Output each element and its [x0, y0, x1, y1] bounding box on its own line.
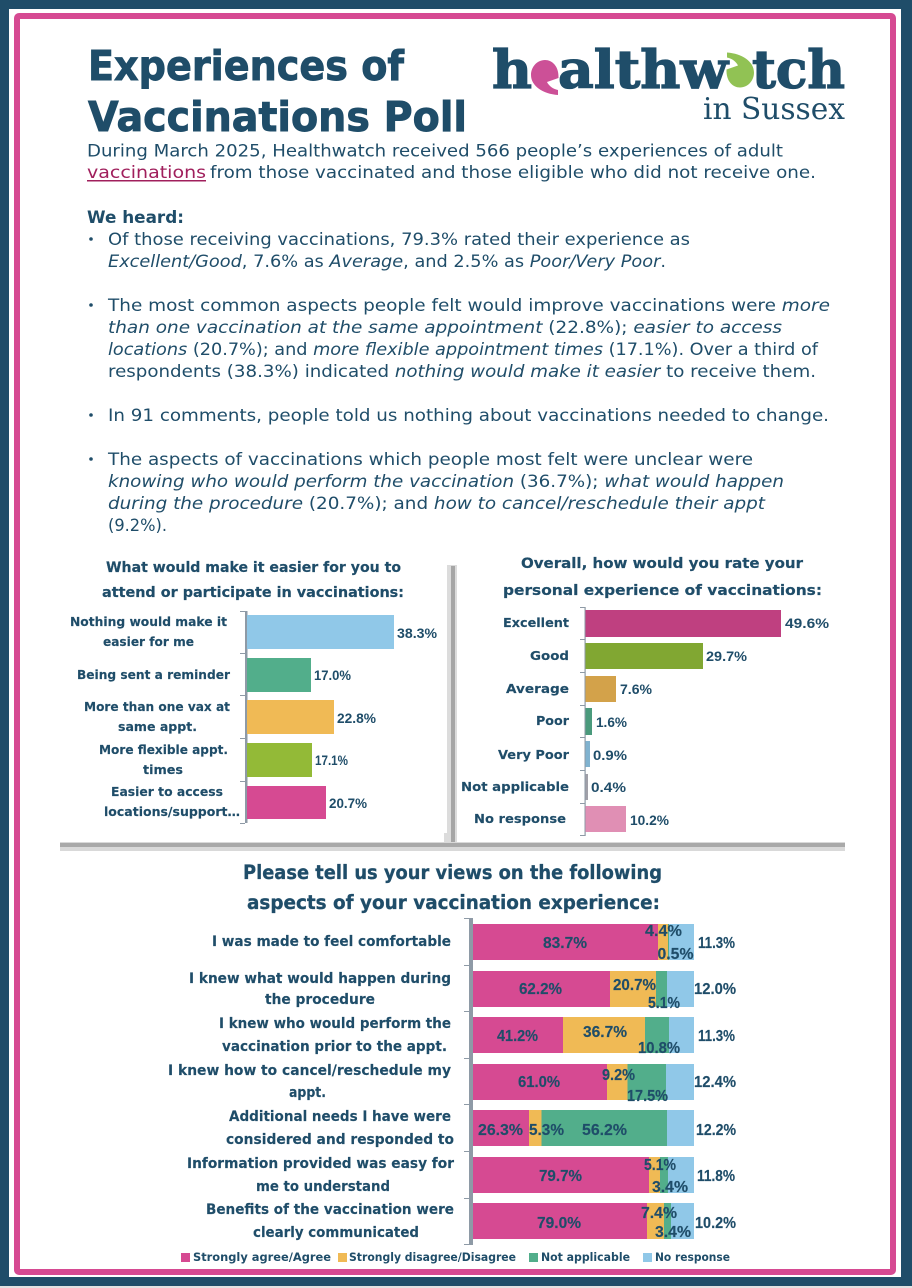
row: who would perform: 36.7% [583, 1024, 627, 1041]
bullet: improvements: locations (20.7%); and more flexible appointment times (17.1%). Over a third of [108, 339, 819, 359]
row: cancel or reschedule: 9.2% [602, 1067, 635, 1084]
axis [240, 611, 248, 824]
statement labels: considered and responded to [226, 1132, 454, 1148]
statement labels: I knew how to cancel/reschedule my [168, 1063, 451, 1079]
row: benefits communicated [473, 1203, 736, 1241]
category labels [461, 616, 570, 827]
row: who would perform: 10.8% [638, 1040, 680, 1057]
category labels: More than one vax at [84, 700, 230, 715]
statement labels: appt. [289, 1085, 326, 1101]
logo: Healthwatch in Sussex: tch [752, 40, 845, 101]
intro text [87, 140, 816, 182]
we heard heading: We heard: [87, 207, 184, 227]
row: cancel or reschedule: 17.5% [627, 1088, 668, 1105]
row: additional needs: 26.3% [478, 1122, 523, 1139]
panel dividers [60, 565, 845, 851]
row: what would happen: 5.1% [648, 995, 680, 1012]
category labels: Good [530, 649, 569, 664]
category labels [70, 615, 240, 820]
chart heading: personal experience of vaccinations: [503, 583, 822, 599]
category labels: locations/support… [104, 805, 240, 820]
category labels: Excellent [503, 616, 569, 631]
row: information easy to understand: 79.7% [539, 1168, 582, 1185]
category labels: Very Poor [498, 748, 570, 763]
logo: Healthwatch in Sussex: althw [558, 40, 729, 101]
statement labels: I knew what would happen during [189, 971, 451, 987]
axis [580, 607, 586, 836]
statement labels: Additional needs I have were [229, 1109, 451, 1125]
category labels: Poor [536, 714, 570, 729]
row: who would perform: 41.2% [497, 1028, 538, 1045]
row: benefits communicated: 10.2% [695, 1215, 736, 1232]
row: what would happen [473, 971, 736, 1012]
bullet: unclear aspects: during the procedure (20.7%); and how to cancel/reschedule their appt [108, 493, 767, 513]
row: comfortable [473, 923, 735, 963]
logo: Healthwatch in Sussex [492, 40, 845, 127]
values: 7.6% [620, 681, 653, 697]
row: what would happen: 62.2% [519, 981, 562, 998]
row: comfortable: 0.5% [658, 946, 694, 963]
statement labels: Information provided was easy for [187, 1156, 454, 1172]
logo: Healthwatch in Sussex: in Sussex [703, 92, 845, 127]
bullet: overall rating [89, 229, 690, 271]
category labels: More flexible appt. [99, 743, 228, 758]
category labels: same appt. [118, 720, 197, 735]
category labels: Easier to access [111, 785, 223, 800]
row: information easy to understand [473, 1157, 735, 1196]
panel: what would make it easier chart [70, 560, 438, 824]
logo: Healthwatch in Sussex: h [492, 40, 532, 101]
legend: No response [655, 1250, 730, 1264]
bullet: improvements: than one vaccination at the same appointment (22.8%); easier to access [108, 317, 782, 337]
legend [181, 1250, 730, 1264]
statement labels: Benefits of the vaccination were [206, 1202, 454, 1218]
intro text: During March 2025, Healthwatch received 566 people’s experiences of adult [87, 140, 783, 160]
bullet: unclear aspects: knowing who would perform the vaccination (36.7%); what would happen [108, 471, 784, 491]
row: information easy to understand: 3.4% [652, 1179, 688, 1196]
values: 38.3% [397, 625, 438, 641]
statement labels: the procedure [265, 992, 375, 1008]
row: who would perform: 11.3% [698, 1028, 735, 1045]
values: 10.2% [630, 812, 670, 828]
category labels: Average [506, 682, 569, 697]
intro text: vaccinations [87, 162, 206, 182]
statement labels: I was made to feel comfortable [212, 934, 451, 950]
statement labels: I knew who would perform the [219, 1016, 451, 1032]
bars [247, 615, 394, 819]
legend: Not applicable [541, 1250, 630, 1264]
row: who would perform [473, 1017, 735, 1057]
stacked chart heading: Please tell us your views on the following [243, 861, 662, 884]
chart heading [102, 560, 404, 601]
chart heading [503, 556, 822, 599]
bullet: unclear aspects: (9.2%). [108, 515, 167, 535]
bars [586, 610, 781, 832]
values [591, 615, 830, 828]
values: 1.6% [596, 714, 628, 730]
row: benefits communicated: 7.4% [641, 1205, 677, 1222]
stacked chart heading: aspects of your vaccination experience: [247, 891, 660, 914]
row: what would happen: 12.0% [694, 981, 736, 998]
row: benefits communicated: 3.4% [655, 1224, 691, 1241]
stacked chart heading [243, 861, 662, 914]
axis [464, 918, 473, 1245]
values: 29.7% [706, 648, 748, 664]
logo: Healthwatch in Sussex: e [537, 60, 551, 86]
row: comfortable: 11.3% [698, 935, 735, 952]
row: information easy to understand: 5.1% [644, 1157, 676, 1174]
row: additional needs: 56.2% [582, 1122, 627, 1139]
row: additional needs: 12.2% [696, 1122, 736, 1139]
bullet: nothing to change: In 91 comments, people told us nothing about vaccinations needed to change. [108, 405, 829, 425]
values: 22.8% [337, 710, 377, 726]
legend: Strongly disagree/Disagree [349, 1250, 516, 1264]
values: 17.0% [314, 667, 352, 683]
panel: overall rating chart [461, 556, 830, 836]
row: benefits communicated: 79.0% [537, 1215, 581, 1232]
title: Vaccinations Poll [88, 93, 467, 141]
row: comfortable: 83.7% [543, 935, 587, 952]
legend: Strongly agree/Agree [193, 1250, 331, 1264]
row: cancel or reschedule [473, 1064, 736, 1105]
values [314, 625, 438, 811]
category labels: No response [474, 812, 566, 827]
bullet: unclear aspects: The aspects of vaccinations which people most felt were unclear were [107, 449, 753, 469]
title [88, 42, 467, 141]
row: cancel or reschedule: 61.0% [518, 1074, 560, 1091]
title: Experiences of [88, 42, 405, 90]
row: comfortable: 4.4% [645, 923, 682, 940]
row: cancel or reschedule: 12.4% [694, 1074, 736, 1091]
statement labels [168, 934, 454, 1241]
row: additional needs: 5.3% [529, 1122, 564, 1139]
category labels: Being sent a reminder [77, 668, 231, 683]
values: 49.6% [785, 615, 830, 631]
bullet: unclear aspects [89, 449, 784, 535]
row: information easy to understand: 11.8% [697, 1168, 735, 1185]
chart heading: Overall, how would you rate your [521, 556, 803, 572]
stacked bar chart [168, 918, 736, 1245]
row: what would happen: 20.7% [613, 977, 656, 994]
chart heading: What would make it easier for you to [106, 560, 401, 576]
statement labels: clearly communicated [253, 1225, 419, 1241]
chart heading: attend or participate in vaccinations: [102, 585, 404, 601]
intro text: from those vaccinated and those eligible who did not receive one. [210, 162, 816, 182]
statement labels: me to understand [256, 1179, 390, 1195]
category labels: easier for me [103, 635, 194, 650]
values: 17.1% [315, 752, 348, 768]
values: 0.4% [591, 779, 627, 795]
logo: Healthwatch in Sussex: a [733, 60, 747, 86]
bullet: overall rating: Excellent/Good , 7.6% as Average, and 2.5% as Poor/Very Poor . [108, 251, 666, 271]
bullet: improvements: respondents (38.3%) indicated nothing would make it easier to receive them. [108, 361, 816, 381]
values: 20.7% [329, 795, 368, 811]
values: 0.9% [593, 747, 628, 763]
category labels: Nothing would make it [70, 615, 227, 630]
bullet: improvements [89, 295, 830, 381]
bullet: overall rating: Of those receiving vaccinations, 79.3% rated their experience as [108, 229, 690, 249]
row: additional needs [473, 1110, 736, 1146]
category labels: times [143, 763, 183, 778]
category labels: Not applicable [461, 780, 569, 795]
statement labels: vaccination prior to the appt. [222, 1039, 447, 1055]
bullet: improvements: The most common aspects people felt would improve vaccinations were more [107, 295, 830, 315]
